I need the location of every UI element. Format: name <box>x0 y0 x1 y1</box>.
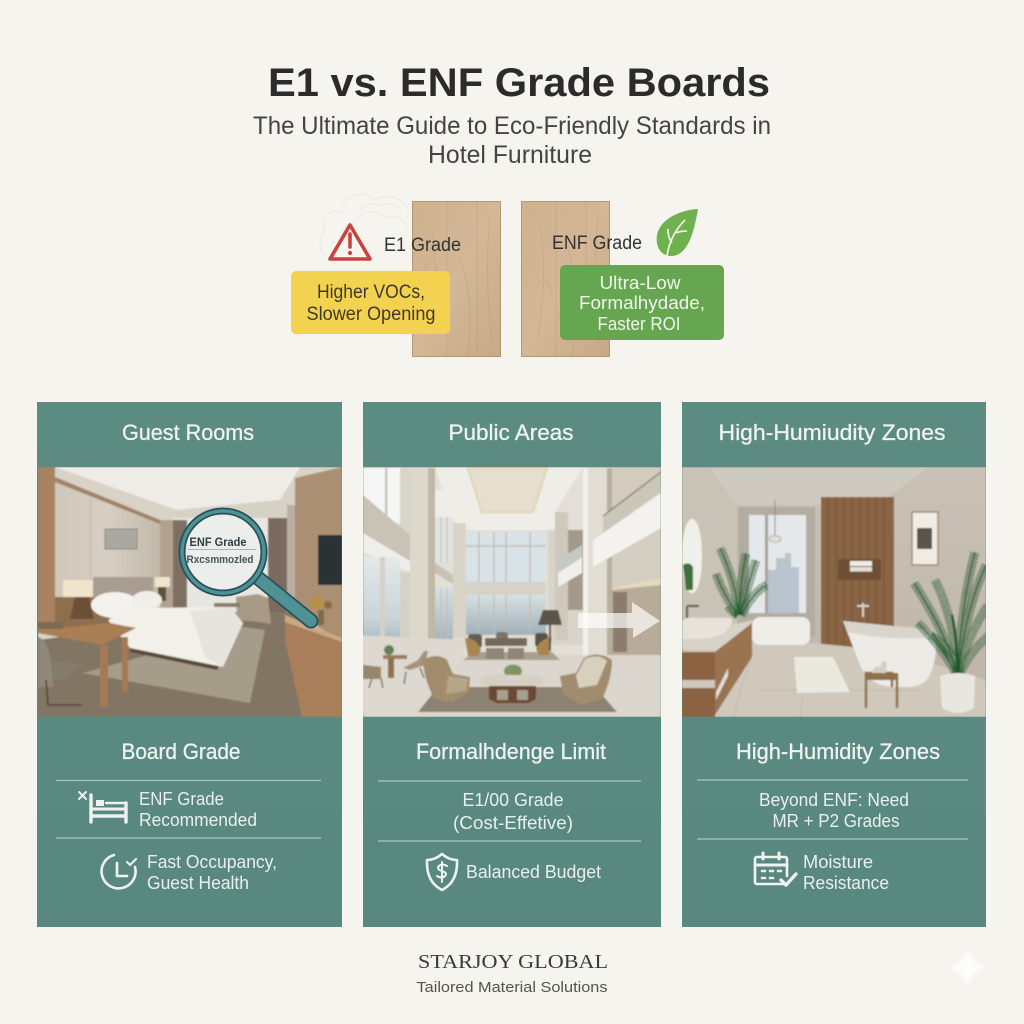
text: ENF Grade Recommended: ENF Grade <box>139 789 224 809</box>
icon: calendar with check <box>755 853 796 885</box>
callout: green: Ultra-Low <box>600 272 681 293</box>
board: ENF wood panel <box>521 201 610 357</box>
heading: Formaldehyde limit: Formalhdenge Limit <box>416 739 606 764</box>
board: E1 wood panel <box>412 201 501 357</box>
icon: bed <box>79 792 126 822</box>
text: Moisture Resistance <box>803 852 889 893</box>
text: ENF Grade Recommended <box>139 789 257 830</box>
heading: Guest Rooms: Guest Rooms <box>122 420 254 445</box>
text: Fast Occupancy, Guest Health: Fast Occupancy, <box>147 852 277 872</box>
panel: public areas <box>355 402 661 927</box>
text: ENF Grade Recommended: Recommended <box>139 810 257 830</box>
heading: High-Humidity Zones: High-Humidity Zones <box>736 739 940 764</box>
icon: warning triangle <box>330 225 370 259</box>
subtitle: The Ultimate Guide to Eco-Friendly Standards in <box>253 112 771 140</box>
icon: magnifier with ENF Grade <box>182 511 311 621</box>
callout: yellow: Slower Opening <box>306 304 436 325</box>
photo: hotel lobby <box>355 467 661 717</box>
label: E1 Grade: E1 Grade <box>384 235 461 256</box>
heading: Board Grade: Board Grade <box>122 739 240 764</box>
text: Beyond ENF need MR + P2 grades: MR + P2 Grades <box>772 811 900 831</box>
icon: magnifier with ENF Grade: Rxcsmmozled <box>186 554 254 566</box>
text: Fast Occupancy, Guest Health: Guest Health <box>147 873 249 893</box>
footer: brand: Tailored Material Solutions <box>416 979 608 996</box>
panel: high-humidity zones <box>682 402 990 927</box>
heading: Public Areas: Public Areas <box>448 420 574 445</box>
icon: sparkle <box>946 947 988 987</box>
text: E1/00 Grade (Cost-Effetive): E1/00 Grade <box>462 790 564 810</box>
photo: hotel bathroom <box>682 467 990 717</box>
title: E1 vs. ENF Grade Boards <box>268 61 770 105</box>
text: Moisture Resistance: Moisture <box>803 852 873 872</box>
callout: green <box>560 265 724 340</box>
subtitle: Hotel Furniture <box>428 141 592 169</box>
subtitle <box>253 112 771 169</box>
callout: green: Faster ROI <box>598 313 680 334</box>
text: E1/00 Grade (Cost-Effetive) <box>453 790 573 833</box>
panel: guest rooms <box>37 402 342 927</box>
photo: hotel guest room <box>38 467 342 717</box>
text: Beyond ENF need MR + P2 grades <box>759 790 909 831</box>
footer: brand <box>416 951 608 996</box>
text: Balanced Budget: Balanced Budget <box>466 862 601 882</box>
icon: green leaf <box>657 209 698 256</box>
text: Fast Occupancy, Guest Health <box>147 852 277 893</box>
icon: shield with dollar <box>427 854 457 890</box>
icon: magnifier with ENF Grade: ENF Grade <box>190 535 247 549</box>
arrow: translucent white arrow <box>578 602 660 638</box>
callout: green: Formalhydade, <box>579 292 705 313</box>
text: Beyond ENF need MR + P2 grades: Beyond ENF: Need <box>759 790 909 810</box>
callout: yellow: Higher VOCs, <box>317 282 425 303</box>
comparison: E1 vs ENF boards <box>291 194 724 357</box>
callout: yellow <box>291 271 450 334</box>
footer: brand: STARJOY GLOBAL <box>418 951 608 973</box>
icon: faint cloud of emissions <box>320 194 409 260</box>
label: ENF Grade: ENF Grade <box>552 233 642 254</box>
icon: clock with check <box>102 855 136 888</box>
heading: High-Humiudity Zones: High-Humiudity Zones <box>718 420 946 445</box>
text: E1/00 Grade (Cost-Effetive): (Cost-Effetive) <box>453 813 573 833</box>
text: Moisture Resistance: Resistance <box>803 873 889 893</box>
